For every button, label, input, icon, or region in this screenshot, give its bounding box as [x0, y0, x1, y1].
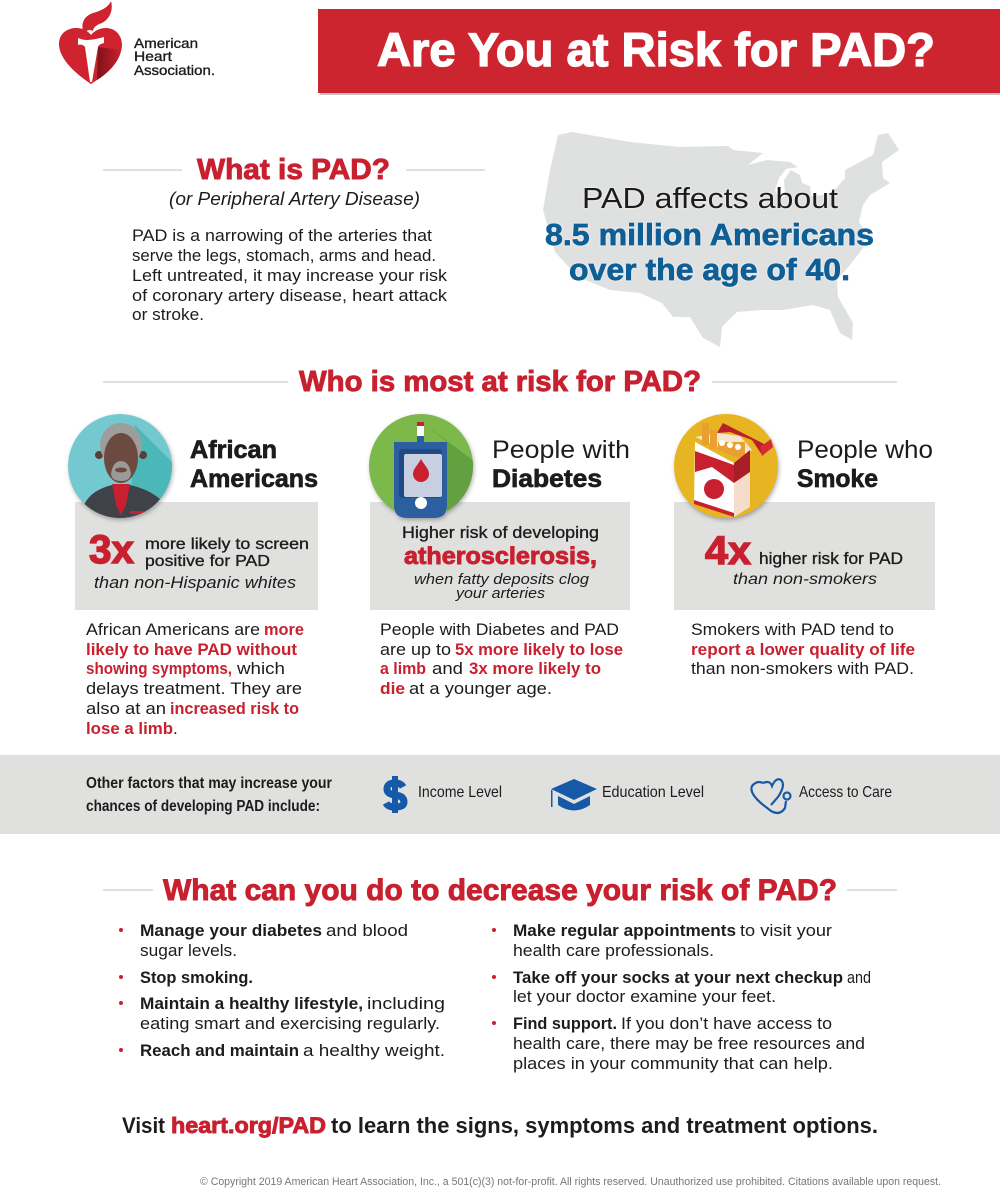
logo: American Heart Association: American [134, 35, 198, 51]
logo: American Heart Association [59, 1, 215, 84]
US map with statistic [543, 132, 899, 347]
description [86, 620, 304, 738]
statistic: 4x [705, 529, 903, 588]
description: which [236, 659, 285, 678]
stat box [370, 502, 630, 610]
map: United States [543, 132, 899, 347]
list: actions right column: health care professionals. [513, 941, 714, 960]
statistic: 3x [89, 528, 309, 592]
panel: African Americans [68, 414, 318, 738]
list: actions left column: Stop smoking. [140, 968, 253, 987]
statistic: atherosclerosis: Higher risk of developing [402, 523, 599, 542]
description: a limb [380, 659, 426, 678]
description: People with Diabetes and PAD [380, 620, 619, 639]
statistic: 4x: than non-smokers [733, 571, 877, 588]
label: access to care: Access to Care [799, 784, 892, 801]
description [380, 620, 623, 698]
list: actions left column: sugar levels. [140, 941, 237, 960]
description: also at an [86, 699, 166, 718]
title banner: Are You at Risk for PAD? [377, 23, 935, 76]
card title: People who [797, 436, 933, 464]
statistic: 3x: positive for PAD [145, 553, 270, 570]
icon: graduation cap [551, 779, 597, 810]
list: actions right column: to visit your [740, 921, 832, 940]
other factors intro [86, 775, 332, 815]
description: . [173, 719, 178, 738]
card title: Diabetes [492, 465, 602, 493]
list: actions right column: Make regular appointments [513, 921, 736, 940]
icon: glucose meter [369, 414, 475, 518]
list: actions left column: Manage your diabetes [140, 921, 322, 940]
section: what is PAD [132, 154, 448, 324]
definition paragraph [132, 226, 448, 324]
statistic text: PAD affects about [582, 183, 838, 215]
description: at a younger age. [409, 679, 552, 698]
other factors intro: chances of developing PAD include: [86, 798, 320, 815]
list: actions left column: a healthy weight. [303, 1041, 445, 1060]
statistic: 3x: than non-Hispanic whites [94, 573, 297, 592]
label: education level: Education Level [602, 784, 704, 801]
definition paragraph: of coronary artery disease, heart attack [132, 286, 448, 305]
heading: decrease your risk: What can you do to decrease your risk of PAD? [163, 874, 837, 907]
stat box [75, 502, 318, 610]
description: die [380, 679, 405, 698]
panel: People with Diabetes [369, 414, 630, 698]
list: actions right column: let your doctor examine your feet. [513, 987, 776, 1006]
label: income level: Income Level [418, 784, 502, 801]
statistic text [545, 183, 874, 287]
card title: African [190, 436, 277, 464]
list: actions right column: Find support. [513, 1014, 617, 1033]
card title: People with [492, 436, 630, 464]
statistic: atherosclerosis: atherosclerosis, [404, 543, 597, 570]
description: are up to [380, 640, 451, 659]
list: actions left column: Reach and maintain [140, 1041, 299, 1060]
stat box [674, 502, 935, 610]
list: actions left column: and blood [326, 921, 408, 940]
definition paragraph: PAD is a narrowing of the arteries that [132, 226, 432, 245]
logo: American Heart Association: Heart [134, 48, 172, 64]
card title: Smoke [797, 465, 878, 493]
statistic: 3x: more likely to screen [145, 536, 309, 553]
statistic text: over the age of 40. [569, 252, 850, 287]
statistic: 4x: 4x [705, 529, 751, 573]
list: actions right column: If you don’t have access to [621, 1014, 832, 1033]
statistic text: 8.5 million Americans [545, 217, 874, 252]
statistic: 4x: higher risk for PAD [759, 549, 903, 568]
icon: dollar sign [386, 776, 404, 813]
description: and [432, 659, 463, 678]
description: 5x more likely to lose [455, 640, 623, 659]
list: actions left column: eating smart and exercising regularly. [140, 1014, 440, 1033]
description: likely to have PAD without [86, 640, 297, 659]
copyright: © Copyright 2019 American Heart Association, Inc., a 501(c)(3) not-for-profit. All rights reserved. Unauthorized use prohibited. Citations available upon request. [200, 1176, 941, 1188]
statistic: atherosclerosis: when fatty deposits clog [414, 571, 590, 588]
call to action: Visit [122, 1113, 166, 1138]
panel: other factors band [0, 755, 1000, 834]
statistic: atherosclerosis [402, 523, 599, 602]
logo: American Heart Association: Association. [134, 62, 215, 78]
panel: People who Smoke [674, 414, 935, 678]
title banner [318, 9, 1000, 95]
description: report a lower quality of life [691, 640, 915, 659]
description: more [264, 620, 304, 639]
card title [797, 436, 933, 493]
description: than non-smokers with PAD. [691, 659, 914, 678]
list: actions right column [492, 921, 871, 1073]
definition paragraph: Left untreated, it may increase your risk [132, 266, 448, 285]
call to action: to learn the signs, symptoms and treatment options. [331, 1113, 878, 1138]
heading: who is most at risk: Who is most at risk for PAD? [299, 366, 701, 398]
heading: what is PAD: What is PAD? [197, 154, 390, 186]
statistic: 3x: 3x [89, 528, 134, 572]
description [691, 620, 915, 678]
description: showing symptoms, [86, 659, 232, 678]
card title: Americans [190, 465, 318, 493]
list: actions left column: including [367, 994, 445, 1013]
icon: cigarette pack [674, 414, 778, 518]
statistic: atherosclerosis: your arteries [455, 585, 546, 602]
icon: man portrait [68, 414, 180, 520]
description: lose a limb [86, 719, 173, 738]
card title [190, 436, 318, 493]
list: actions right column: and [847, 968, 871, 987]
call to action: heart.org/PAD [171, 1113, 326, 1138]
card title [492, 436, 630, 493]
description: increased risk to [170, 699, 299, 718]
list: actions right column: Take off your socks at your next checkup [513, 968, 843, 987]
description: African Americans are [86, 620, 260, 639]
icon: stethoscope [751, 779, 790, 813]
list: actions right column: health care, there may be free resources and [513, 1034, 865, 1053]
other factors intro: Other factors that may increase your [86, 775, 332, 792]
description: 3x more likely to [469, 659, 601, 678]
list: actions left column: Maintain a healthy lifestyle, [140, 994, 363, 1013]
list: actions left column [119, 921, 445, 1060]
subheading: (or Peripheral Artery Disease) [169, 189, 420, 209]
definition paragraph: serve the legs, stomach, arms and head. [132, 246, 436, 265]
list: actions right column: places in your community that can help. [513, 1054, 833, 1073]
description: delays treatment. They are [86, 679, 302, 698]
definition paragraph: or stroke. [132, 305, 204, 324]
description: Smokers with PAD tend to [691, 620, 894, 639]
